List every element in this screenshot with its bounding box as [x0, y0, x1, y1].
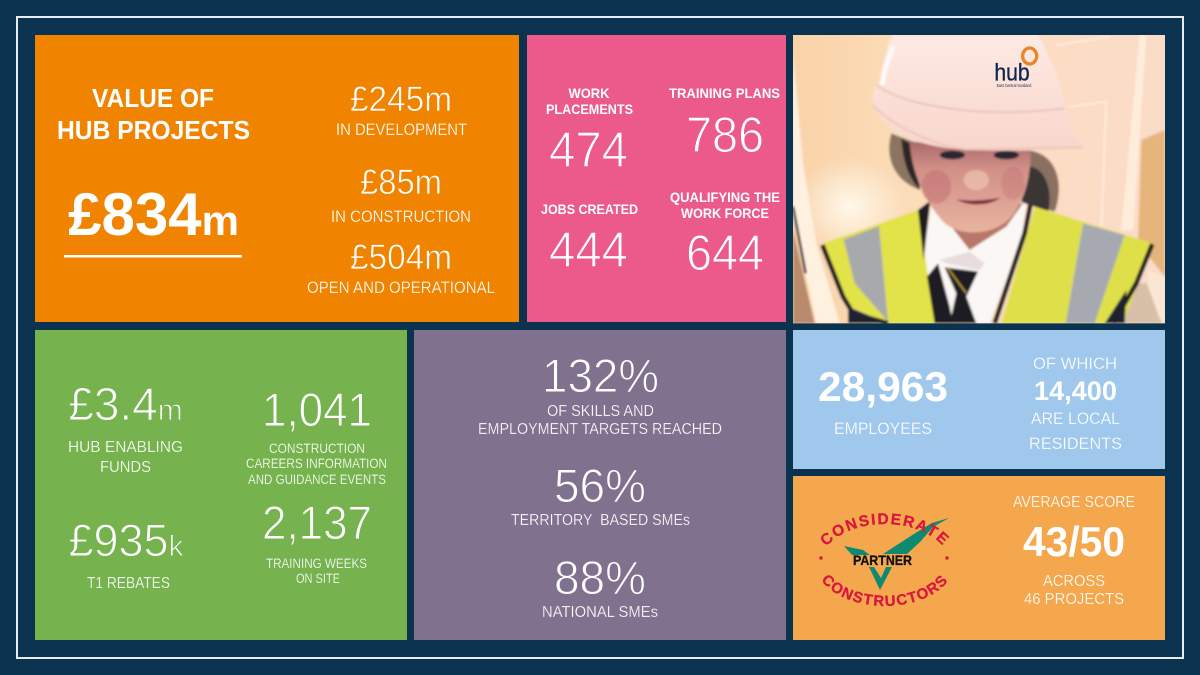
stat: average score [1013, 494, 1135, 608]
stat: qualifying the work force: WORK FORCE [681, 205, 769, 221]
neck [940, 203, 1023, 250]
panel: targets and SMEs [414, 330, 786, 640]
icon: considerate constructors partner logo [819, 513, 950, 606]
stat: in construction: £85m [360, 163, 442, 202]
heading: value of hub projects [57, 83, 250, 145]
hub logo strapline: East Central Scotland [997, 83, 1032, 88]
logo tick [844, 518, 949, 590]
stat: training weeks: 2,137 [262, 496, 372, 549]
vest dark trim [918, 201, 930, 260]
stat: t1 rebates: £935k [68, 515, 185, 566]
mouth [956, 198, 1000, 204]
stat: training plans: TRAINING PLANS [669, 85, 780, 101]
stat: local residents [1029, 354, 1122, 453]
hair [889, 133, 926, 190]
stat: employees: EMPLOYEES [834, 419, 932, 438]
logo ring text: considerate: CONSIDERATE [821, 513, 950, 546]
stat: open and operational [307, 238, 495, 297]
stat: work placements: PLACEMENTS [546, 101, 633, 117]
stat: work placements: 474 [549, 122, 628, 178]
stat: in development [336, 80, 467, 139]
stat: in construction [331, 163, 471, 226]
stat: skills and employment targets: EMPLOYMENT TARGETS REACHED [478, 421, 722, 438]
stat: skills and employment targets: OF SKILLS AND [547, 403, 654, 420]
stat: open and operational: £504m [350, 238, 452, 277]
stat: local residents: ARE LOCAL [1031, 409, 1120, 428]
stat: training plans: 786 [686, 107, 764, 163]
stat: local residents: 14,400 [1034, 376, 1117, 406]
stat: local residents: OF WHICH [1033, 354, 1117, 373]
stat: skills and employment targets [478, 349, 722, 438]
stat: territory based SMEs: 56% [554, 459, 646, 512]
total value: £834m [68, 181, 239, 248]
stat: hub enabling funds [68, 378, 183, 476]
stat: hub enabling funds: £3.4m [68, 378, 183, 430]
panel: employees [793, 330, 1165, 469]
stat: in construction: IN CONSTRUCTION [331, 208, 471, 226]
panel: value of hub projects [35, 35, 519, 322]
stat: average score: 46 PROJECTS [1024, 591, 1124, 608]
heading: value of hub projects: VALUE OF [92, 83, 214, 113]
stat: hub enabling funds: FUNDS [100, 459, 151, 476]
stat: qualifying the work force [670, 189, 780, 281]
stat: in development: IN DEVELOPMENT [336, 121, 467, 139]
stat: national SMEs: 88% [554, 551, 646, 604]
stat: skills and employment targets: 132% [542, 349, 659, 402]
stat: open and operational: OPEN AND OPERATIONAL [307, 279, 495, 297]
face [910, 142, 1030, 232]
stat: local residents: RESIDENTS [1029, 434, 1122, 453]
panel: considerate constructors [793, 476, 1165, 640]
stat: hub enabling funds: HUB ENABLING [68, 439, 183, 456]
stat: qualifying the work force: 644 [686, 225, 764, 281]
stat: careers events: CAREERS INFORMATION [246, 456, 387, 471]
heading: value of hub projects: HUB PROJECTS [57, 115, 250, 145]
stat: employees [818, 363, 948, 438]
photo: child in hard hat and hi-vis vest [790, 30, 1170, 330]
hub logo text: hub [994, 60, 1030, 87]
collar shadow [940, 252, 985, 270]
stat: average score: 43/50 [1023, 518, 1125, 565]
stat: t1 rebates: T1 REBATES [87, 575, 170, 592]
icon: hub logo ring [1023, 48, 1037, 64]
logo dots [819, 556, 949, 560]
stat: training weeks: TRAINING WEEKS [266, 556, 367, 571]
stat: territory based SMEs: TERRITORY BASED SMEs [511, 512, 690, 529]
panel: funds and events [35, 330, 407, 640]
stat: careers events [246, 383, 387, 487]
stat: territory based SMEs [511, 459, 690, 529]
stat: qualifying the work force: QUALIFYING THE [670, 189, 780, 205]
stat: jobs created: 444 [549, 222, 628, 278]
stat: average score: ACROSS [1043, 573, 1105, 590]
stat: jobs created [541, 201, 638, 278]
stat: work placements: WORK [568, 85, 610, 101]
shirt [923, 203, 1026, 323]
vest [823, 210, 937, 323]
stat: careers events: 1,041 [262, 383, 372, 436]
stat: in development: £245m [350, 80, 452, 119]
eyes [940, 151, 965, 159]
stat: work placements [546, 85, 633, 178]
stat: employees: 28,963 [818, 363, 948, 410]
stat: t1 rebates [68, 515, 185, 592]
stat: average score: AVERAGE SCORE [1013, 494, 1135, 511]
stat: careers events: CONSTRUCTION [269, 441, 365, 456]
stat: national SMEs [542, 551, 658, 621]
stat: training weeks: ON SITE [296, 571, 340, 586]
stat: careers events: AND GUIDANCE EVENTS [248, 472, 386, 487]
stat: jobs created: JOBS CREATED [541, 201, 638, 217]
logo ring text: constructors: CONSTRUCTORS [823, 575, 946, 606]
logo partner text: PARTNER [853, 552, 912, 568]
helmet [873, 35, 1082, 151]
stat: training weeks [262, 496, 372, 586]
stat: training plans [669, 85, 780, 163]
stat: national SMEs: NATIONAL SMEs [542, 604, 658, 621]
tie [927, 263, 953, 323]
panel: employment stats [527, 35, 786, 322]
total underline [64, 255, 242, 258]
